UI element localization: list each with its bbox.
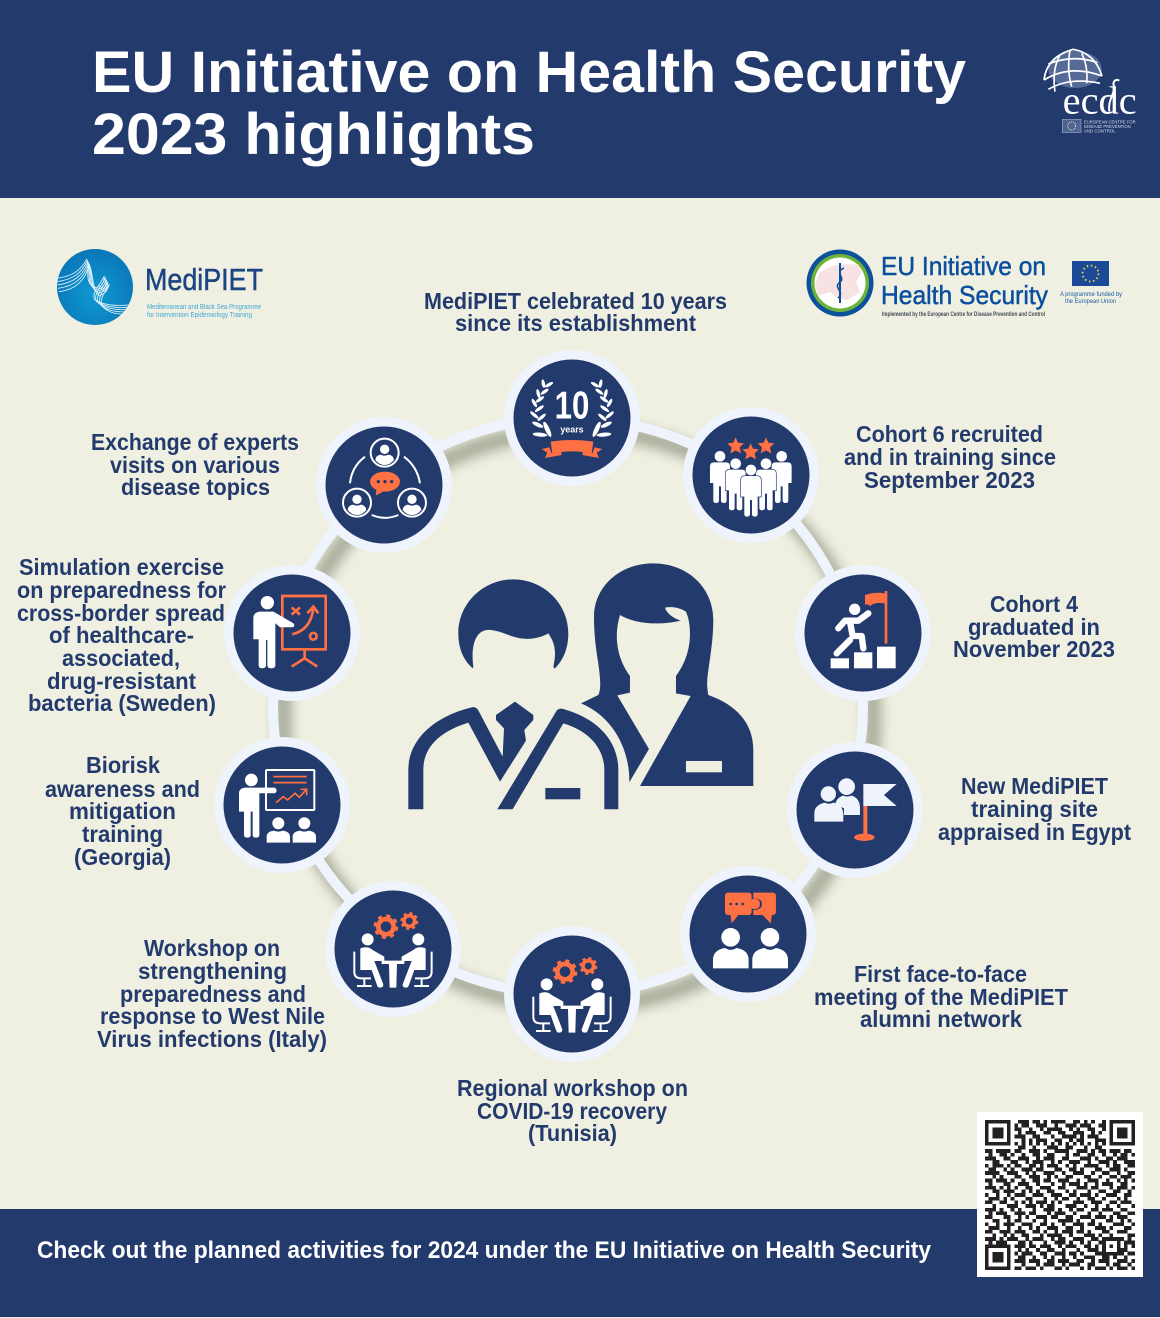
label: Italy workshop: Virus infections (Italy) bbox=[97, 1026, 327, 1052]
icon: laurel wreath with 10 years bbox=[529, 379, 615, 458]
logo: EU Initiative on Health Security: A programme funded by bbox=[1060, 292, 1122, 298]
label: MediPIET 10 years: since its establishment bbox=[455, 310, 696, 336]
node: alumni network bbox=[680, 866, 816, 1002]
icon: meeting with gears bbox=[533, 958, 611, 1033]
label: Georgia biorisk training: training bbox=[82, 821, 163, 847]
logo: MediPIET: Mediterranean and Black Sea Programme bbox=[147, 304, 261, 311]
icon: group with stars bbox=[710, 437, 792, 517]
label: exchange of experts: disease topics bbox=[121, 474, 270, 500]
label: Sweden simulation exercise: on preparedness for bbox=[17, 577, 226, 603]
icon: laurel wreath with 10 years: 10 bbox=[555, 383, 589, 427]
logo: EU Initiative on Health Security: Implemented by the European Centre for Disease Prevention and Control bbox=[882, 312, 1045, 318]
label: Georgia biorisk training: (Georgia) bbox=[74, 844, 171, 870]
label: Sweden simulation exercise: Simulation exercise bbox=[19, 554, 224, 580]
icon: three connected people bbox=[343, 439, 426, 518]
QR code bbox=[977, 1112, 1143, 1277]
node: cohort 6 bbox=[683, 407, 819, 543]
header band bbox=[0, 0, 1160, 198]
label: MediPIET 10 years: MediPIET celebrated 10 years bbox=[424, 288, 727, 314]
label: exchange of experts: Exchange of experts bbox=[91, 429, 299, 455]
logo: ECDC: EUROPEAN CENTRE FOR bbox=[1084, 120, 1136, 125]
label: Tunisia workshop: COVID-19 recovery bbox=[477, 1098, 667, 1124]
label: alumni network bbox=[814, 961, 1068, 1032]
icon: presenter with chart bbox=[239, 770, 316, 843]
ring shadow bbox=[283, 430, 873, 1006]
label: Italy workshop: strengthening bbox=[138, 958, 287, 984]
label: MediPIET 10 years bbox=[424, 288, 727, 336]
title bbox=[92, 40, 966, 167]
label: Georgia biorisk training: mitigation bbox=[69, 798, 176, 824]
label: alumni network: alumni network bbox=[860, 1006, 1022, 1032]
footer band bbox=[0, 1209, 1160, 1317]
label: Italy workshop: Workshop on bbox=[144, 935, 280, 961]
logo: EU Initiative on Health Security: the European Union bbox=[1065, 299, 1116, 305]
node: 10 years bbox=[504, 350, 640, 486]
label: cohort 4: November 2023 bbox=[953, 636, 1115, 662]
footer text: Check out the planned activities for 2024 under the EU Initiative on Health Security bbox=[37, 1237, 932, 1264]
label: Sweden simulation exercise bbox=[17, 554, 226, 716]
label: new training site bbox=[938, 773, 1131, 845]
node: cohort 4 bbox=[795, 565, 931, 701]
logo: MediPIET bbox=[57, 249, 263, 325]
label: Sweden simulation exercise: bacteria (Sweden) bbox=[28, 690, 216, 716]
node: new training site bbox=[787, 742, 923, 878]
icon: strategy board bbox=[253, 596, 326, 668]
logo: MediPIET: MediPIET bbox=[145, 262, 263, 297]
central figures: doctors bbox=[408, 563, 753, 809]
EU flag bbox=[1072, 261, 1109, 286]
logo: ECDC: AND CONTROL bbox=[1084, 128, 1116, 133]
label: Italy workshop bbox=[97, 935, 327, 1052]
title: EU Initiative on Health Security bbox=[92, 40, 966, 105]
title: 2023 highlights bbox=[92, 102, 535, 167]
label: Sweden simulation exercise: associated, bbox=[62, 645, 180, 671]
logo: EU Initiative on Health Security: EU Initiative on bbox=[881, 251, 1046, 281]
label: cohort 6 bbox=[844, 421, 1056, 493]
icon: two people talking bbox=[713, 893, 788, 968]
label: new training site: appraised in Egypt bbox=[938, 819, 1131, 845]
label: new training site: New MediPIET bbox=[961, 773, 1108, 799]
label: alumni network: First face-to-face bbox=[854, 961, 1027, 987]
label: new training site: training site bbox=[971, 796, 1098, 822]
label: cohort 6: and in training since bbox=[844, 444, 1056, 470]
logo: EU Initiative on Health Security: Health Security bbox=[881, 280, 1048, 310]
logo: ECDC: ecdc bbox=[1063, 80, 1137, 122]
label: exchange of experts bbox=[91, 429, 299, 500]
label: Georgia biorisk training: Biorisk bbox=[86, 752, 160, 778]
icon: laurel wreath with 10 years: years bbox=[560, 424, 584, 434]
label: Georgia biorisk training: awareness and bbox=[45, 776, 200, 802]
label: Georgia biorisk training bbox=[45, 752, 200, 870]
node: Georgia biorisk training bbox=[214, 737, 350, 873]
label: cohort 6: Cohort 6 recruited bbox=[856, 421, 1043, 447]
icon: climbing steps to flag bbox=[831, 591, 896, 668]
label: Sweden simulation exercise: drug-resistant bbox=[47, 668, 196, 694]
label: Sweden simulation exercise: of healthcare- bbox=[49, 622, 194, 648]
label: cohort 4: graduated in bbox=[968, 614, 1100, 640]
label: Tunisia workshop: (Tunisia) bbox=[528, 1120, 617, 1146]
logo: MediPIET: for Intervention Epidemiology Training bbox=[147, 312, 252, 319]
label: alumni network: meeting of the MediPIET bbox=[814, 984, 1068, 1010]
label: Tunisia workshop bbox=[457, 1075, 688, 1146]
label: Italy workshop: preparedness and bbox=[120, 981, 306, 1007]
label: exchange of experts: visits on various bbox=[110, 452, 280, 478]
label: cohort 4 bbox=[953, 591, 1115, 662]
node: exchange of experts bbox=[316, 417, 452, 553]
ring connector bbox=[273, 418, 863, 994]
node: Tunisia workshop bbox=[504, 926, 640, 1062]
icon: meeting with gears bbox=[354, 913, 432, 988]
label: Tunisia workshop: Regional workshop on bbox=[457, 1075, 688, 1101]
label: Sweden simulation exercise: cross-border spread bbox=[17, 600, 225, 626]
node: Sweden simulation exercise bbox=[224, 565, 360, 701]
logo: ECDC bbox=[1044, 49, 1137, 133]
logo: ECDC: DISEASE PREVENTION bbox=[1084, 124, 1131, 129]
label: Italy workshop: response to West Nile bbox=[100, 1003, 325, 1029]
label: cohort 6: September 2023 bbox=[864, 467, 1035, 493]
icon: people with flag bbox=[814, 778, 897, 841]
label: cohort 4: Cohort 4 bbox=[990, 591, 1078, 617]
logo: EU Initiative on Health Security bbox=[806, 250, 1122, 318]
node: Italy workshop bbox=[325, 881, 461, 1017]
